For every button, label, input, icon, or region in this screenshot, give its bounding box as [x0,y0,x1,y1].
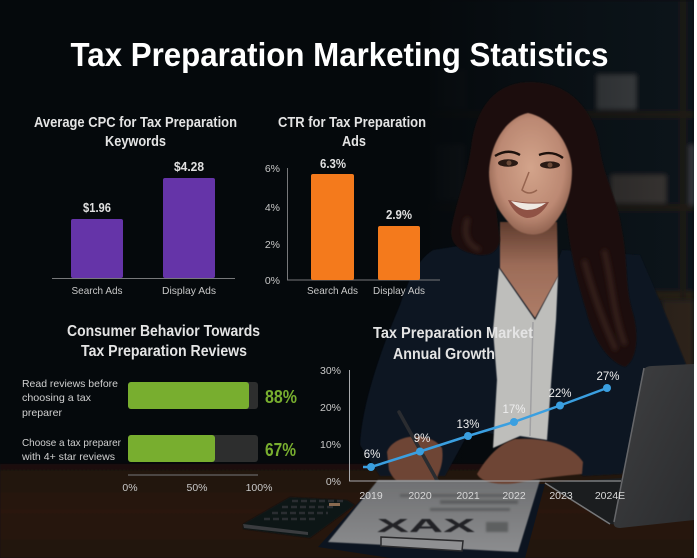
x axis labels [122,482,272,494]
value labels: 9% [414,433,430,445]
chart title: Keywords [105,134,166,150]
bar: display ads: $4.28 [174,160,204,174]
bar: search ads: 6.3% [320,157,346,171]
calculator [243,497,355,538]
pen [399,412,443,491]
chart: CTR [265,115,440,297]
chart title: CTR for Tax Preparation [278,115,426,131]
right hand [477,439,583,484]
year labels [359,490,625,502]
value labels: 17% [502,404,526,416]
row: four star reviews [21,435,296,463]
value labels: 13% [456,419,480,431]
year labels: 2023 [549,490,573,502]
bar: display ads [373,208,425,297]
year labels: 2022 [502,490,526,502]
chart title: Tax Preparation Reviews [81,343,247,360]
y axis labels: 4% [265,202,280,214]
y axis labels [320,365,341,488]
face [489,113,572,235]
bar: display ads: 2.9% [386,208,412,222]
y axis labels: 0% [326,476,341,488]
y axis labels [265,163,280,287]
chart title: Consumer Behavior Towards [67,323,260,340]
bar: display ads: Display Ads [373,285,425,297]
chart title: Ads [342,134,366,150]
year labels: 2021 [456,490,480,502]
row: read reviews [22,378,297,419]
XAX stamp: XAX [377,516,475,536]
y axis labels: 30% [320,365,341,377]
row: four star reviews: with 4+ star reviews [21,451,115,463]
wall behind shoulder [662,300,694,370]
laptop [545,364,694,528]
desk [0,464,694,558]
y axis labels: 20% [320,402,341,414]
clipboard with tax form [318,480,545,558]
row: read reviews: choosing a tax [22,392,92,404]
clip [381,537,463,551]
bar: display ads [162,160,216,297]
bar: display ads: Display Ads [162,285,216,297]
x axis labels: 0% [122,482,138,494]
chart title: Annual Growth [393,346,495,363]
bar: search ads: Search Ads [307,285,358,297]
value labels: 6% [364,449,380,461]
bar: search ads: $1.96 [83,201,111,215]
bar: search ads [307,157,358,297]
row: read reviews: 88% [265,387,297,407]
value labels: 27% [596,371,620,383]
row: read reviews: preparer [22,407,62,419]
chart title: Average CPC for Tax Preparation [34,115,237,131]
title: Tax Preparation Marketing Statistics [70,37,608,74]
neck [500,222,558,318]
x axis labels: 50% [186,482,208,494]
y axis labels: 0% [265,275,280,287]
bar: search ads: Search Ads [72,285,122,297]
growth line [363,384,611,471]
row: four star reviews: 67% [265,440,296,460]
nose [522,172,537,193]
chart: market annual growth [320,325,625,502]
chart title: Tax Preparation Market [373,325,533,342]
blazer [360,240,686,476]
photo: businesswoman [360,82,686,491]
year labels: 2020 [408,490,432,502]
row: four star reviews: Choose a tax preparer [22,437,121,449]
brows and eyes [495,152,563,158]
chart: average CPC [34,115,237,297]
y axis labels: 6% [265,163,280,175]
year labels: 2024E [595,490,625,502]
row: read reviews: Read reviews before [22,378,118,390]
y axis labels: 2% [265,239,280,251]
hair [451,82,636,367]
y axis labels: 10% [320,439,341,451]
bar: search ads [71,201,123,297]
x axis labels: 100% [246,482,272,494]
value labels [364,371,620,461]
year labels: 2019 [359,490,383,502]
blouse [493,268,558,448]
chart: consumer behavior [21,323,297,494]
value labels: 22% [548,388,572,400]
writing hand [387,436,443,489]
smile [508,200,549,218]
